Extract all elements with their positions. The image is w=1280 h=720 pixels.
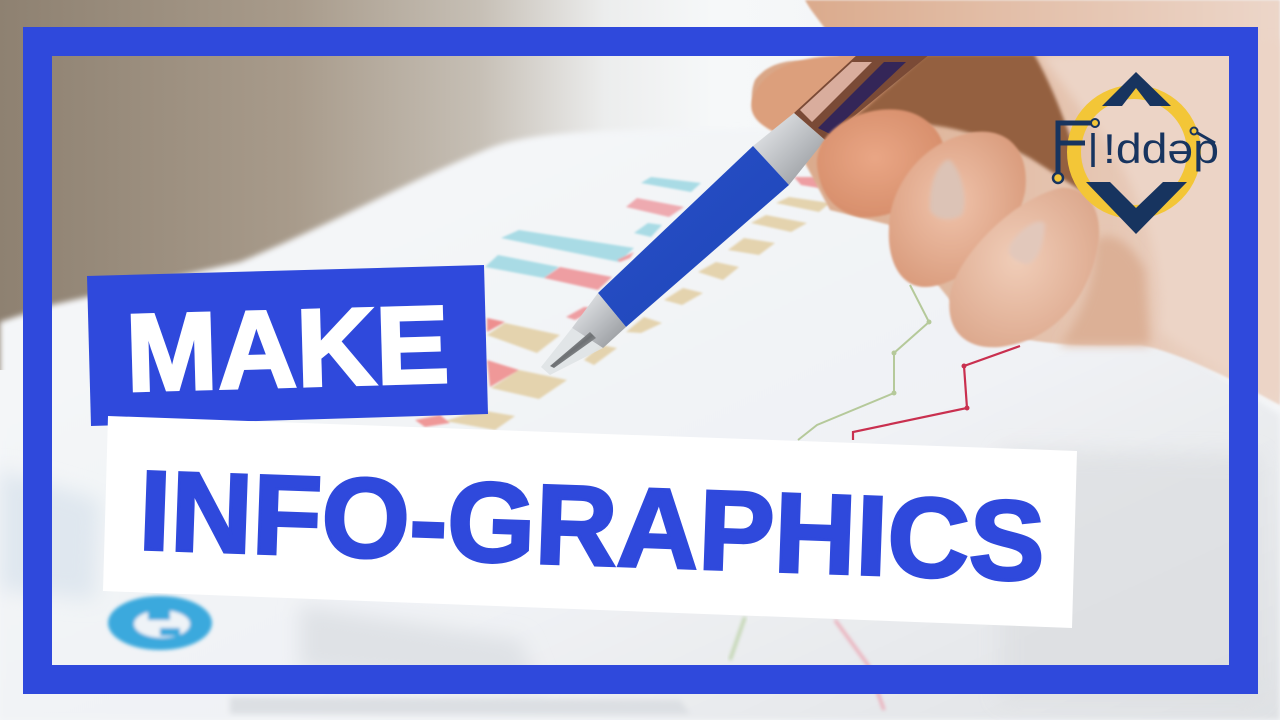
logo bbox=[1053, 72, 1219, 234]
heading: MAKE: MAKE bbox=[124, 283, 451, 415]
logo F mark bbox=[1053, 119, 1215, 183]
fingernails bbox=[930, 160, 964, 219]
pen ribbed collar bbox=[753, 113, 825, 185]
palm bbox=[752, 0, 1280, 405]
banner: MAKE bbox=[87, 265, 488, 426]
logo chevrons bbox=[1102, 72, 1171, 106]
middle finger bbox=[889, 132, 1026, 287]
pen lower collar bbox=[572, 293, 626, 348]
pen tip bbox=[541, 328, 603, 375]
pen bbox=[541, 54, 930, 375]
knuckle finger bbox=[817, 109, 946, 217]
logo ring bbox=[1074, 92, 1194, 212]
bar chart on paper bbox=[415, 177, 830, 430]
pen clear upper barrel bbox=[794, 54, 930, 140]
ring finger bbox=[949, 188, 1099, 347]
heading: INFO-GRAPHICS: INFO-GRAPHICS bbox=[137, 447, 1047, 605]
line chart on paper bbox=[730, 285, 1020, 710]
index finger bbox=[751, 55, 900, 145]
banner: INFO-GRAPHICS bbox=[103, 416, 1077, 628]
dark shadow between fingers bbox=[835, 54, 1088, 195]
palm shadow below ring finger bbox=[1060, 236, 1150, 345]
logo wordmark: !ddəp bbox=[1103, 125, 1219, 172]
hand holding the pen bbox=[751, 0, 1280, 405]
blurred round icon on paper bbox=[108, 596, 212, 650]
pen blue grip bbox=[598, 146, 789, 327]
fingers over the pen bbox=[817, 109, 1099, 347]
wrist highlight bbox=[1040, 40, 1280, 400]
